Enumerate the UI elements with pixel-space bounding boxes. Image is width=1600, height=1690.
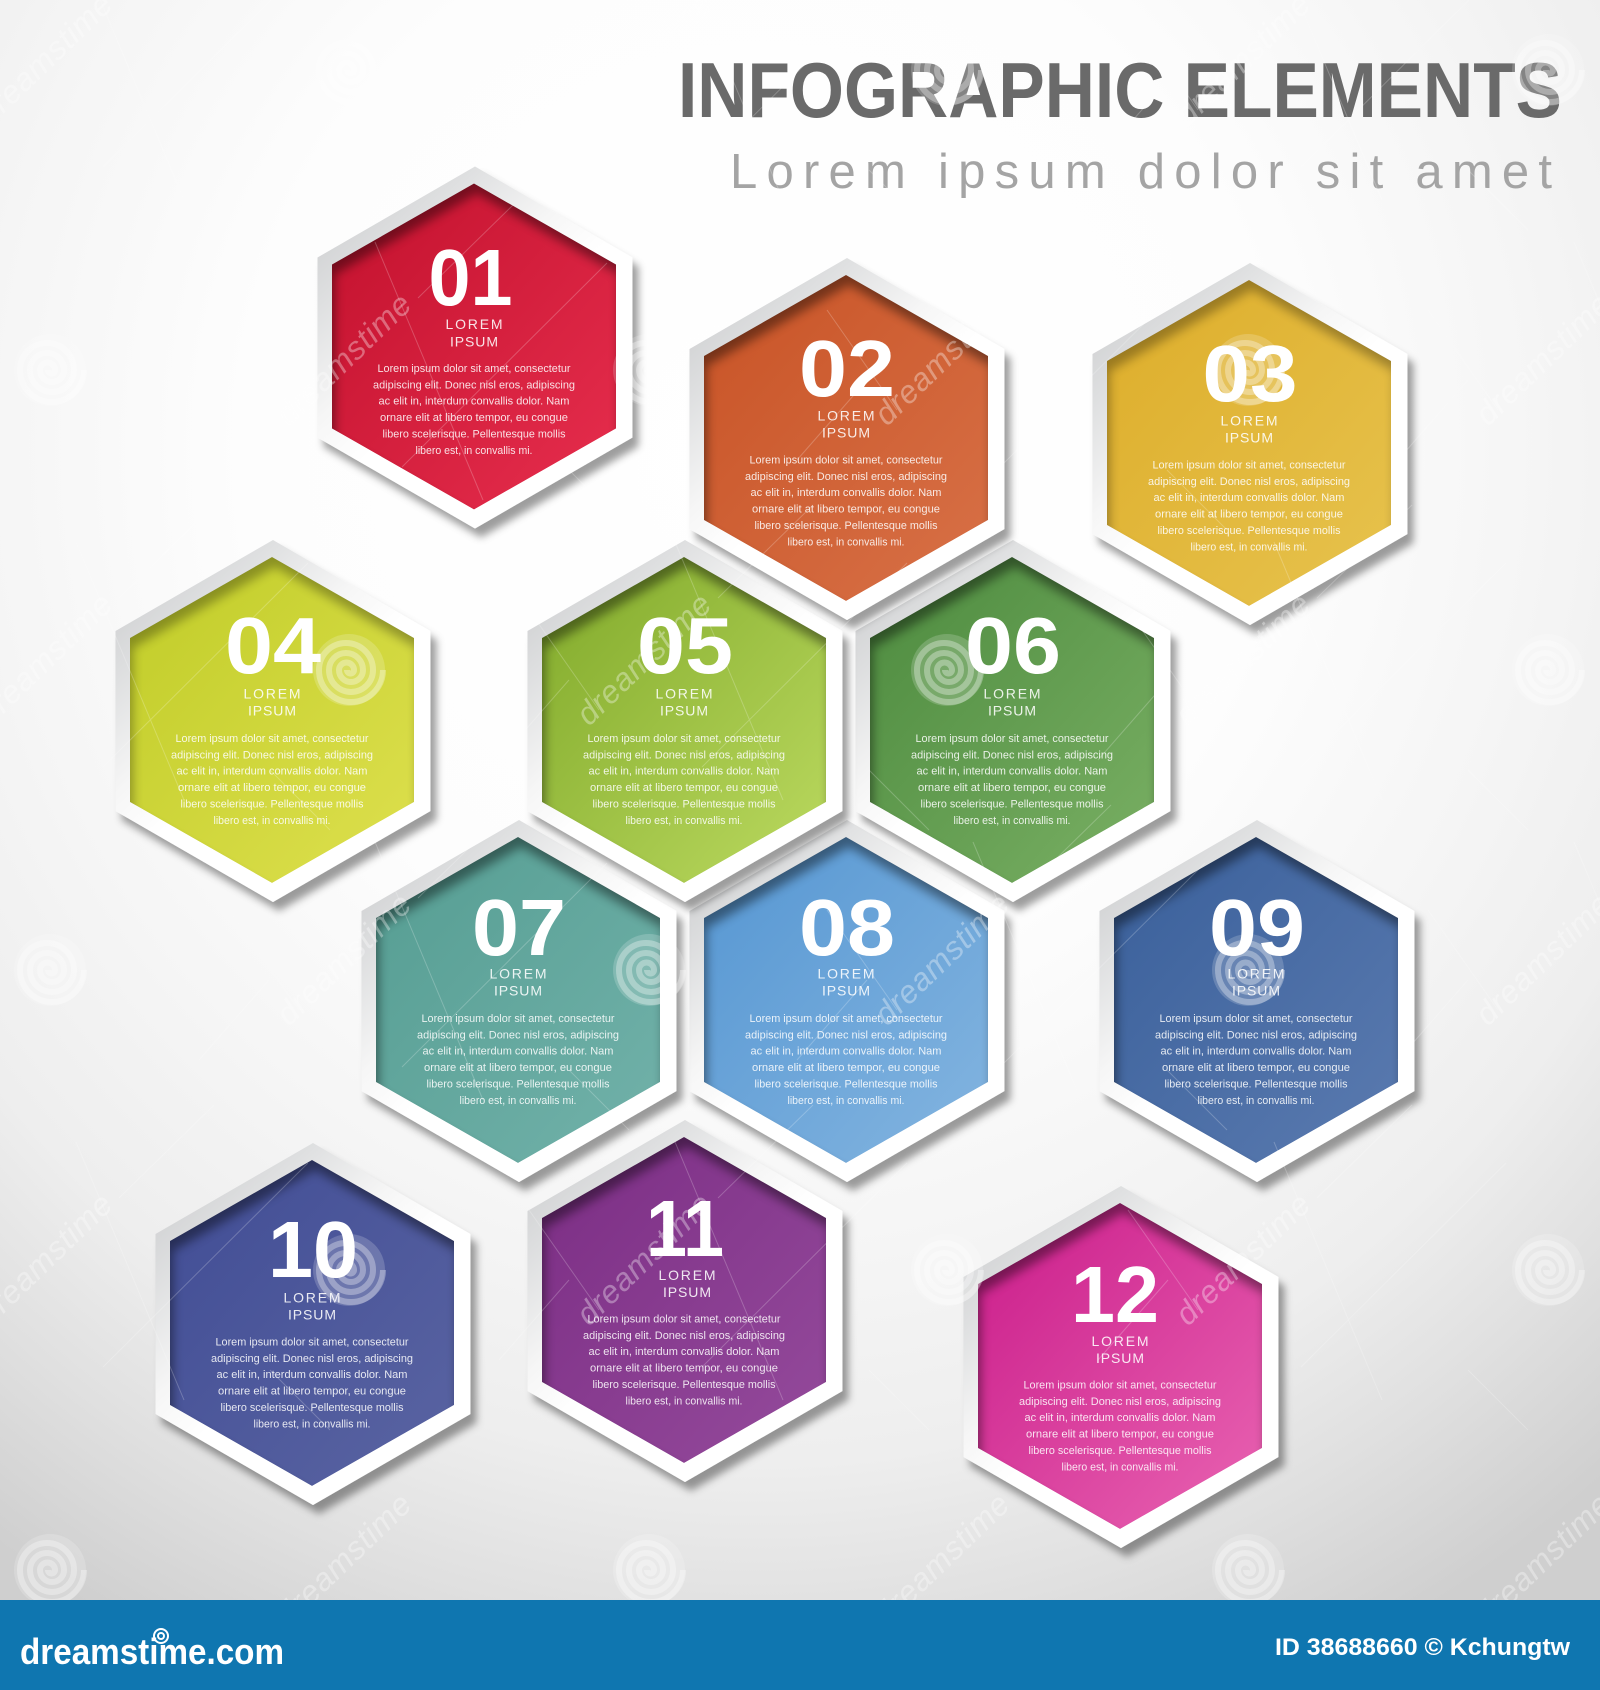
body text: adipiscing elit. Donec nisl eros, adipiscing	[373, 379, 575, 391]
body text: libero est, in convallis mi.	[416, 445, 532, 457]
body text: libero scelerisque. Pellentesque mollis	[426, 1078, 610, 1090]
panel: hexagon 05	[528, 540, 854, 914]
label	[1220, 412, 1278, 446]
body text: libero est, in convallis mi.	[788, 1095, 904, 1107]
body text: adipiscing elit. Donec nisl eros, adipiscing	[211, 1353, 413, 1365]
body text: ac elit in, interdum convallis dolor. Nam	[750, 1046, 942, 1058]
body text: ac elit in, interdum convallis dolor. Nam	[1160, 1046, 1352, 1058]
label: LOREM	[818, 966, 874, 982]
body text: ornare elit at libero tempor, eu congue	[752, 1062, 940, 1074]
body text: libero scelerisque. Pellentesque mollis	[592, 798, 776, 810]
body text: ornare elit at libero tempor, eu congue	[218, 1386, 406, 1398]
body text: adipiscing elit. Donec nisl eros, adipiscing	[1148, 476, 1350, 488]
body text: ac elit in, interdum convallis dolor. Nam	[588, 1346, 780, 1358]
frame	[690, 820, 1004, 1182]
body text: libero scelerisque. Pellentesque mollis	[382, 428, 566, 440]
number: 04	[225, 601, 322, 690]
body text: libero scelerisque. Pellentesque mollis	[920, 798, 1104, 810]
label: LOREM	[984, 686, 1040, 702]
body text: libero scelerisque. Pellentesque mollis	[1158, 525, 1340, 537]
body text: libero est, in convallis mi.	[254, 1418, 370, 1430]
label: LOREM	[284, 1290, 340, 1306]
body text: adipiscing elit. Donec nisl eros, adipiscing	[745, 471, 947, 483]
body text: Lorem ipsum dolor sit amet, consectetur	[1024, 1380, 1217, 1392]
number: 05	[637, 601, 733, 690]
colour fill	[130, 557, 414, 883]
frame	[1100, 820, 1414, 1182]
body text	[745, 454, 947, 548]
colour fill	[1114, 837, 1398, 1163]
label: IPSUM	[660, 702, 708, 718]
panel: hexagon 10	[156, 1143, 482, 1518]
panel: hexagon 03	[1092, 263, 1418, 638]
watermark text: dreamstime	[269, 1486, 418, 1632]
body text: libero est, in convallis mi.	[1198, 1095, 1314, 1107]
body text	[1155, 1013, 1357, 1107]
watermark text: dreamstime	[269, 286, 418, 432]
body text: ornare elit at libero tempor, eu congue	[424, 1062, 612, 1074]
body text	[417, 1013, 619, 1107]
body text: adipiscing elit. Donec nisl eros, adipiscing	[417, 1029, 619, 1041]
body text: libero scelerisque. Pellentesque mollis	[1164, 1078, 1348, 1090]
colour fill	[542, 1137, 826, 1463]
colour fill	[870, 557, 1154, 883]
body text: ac elit in, interdum convallis dolor. Nam	[1154, 492, 1345, 504]
body text: ac elit in, interdum convallis dolor. Nam	[1024, 1412, 1216, 1424]
body text	[171, 733, 373, 827]
footer credit: ID 38688660 © Kchungtw	[1275, 1634, 1570, 1661]
body text: Lorem ipsum dolor sit amet, consectetur	[176, 733, 369, 745]
panel: hexagon 09	[1100, 820, 1426, 1194]
label	[284, 1290, 340, 1322]
body text: libero scelerisque. Pellentesque mollis	[754, 520, 938, 532]
frame	[528, 1120, 842, 1482]
number: 01	[428, 233, 512, 322]
body text	[211, 1336, 413, 1430]
panel: hexagon 04	[116, 540, 442, 914]
body text: ac elit in, interdum convallis dolor. Nam	[916, 766, 1108, 778]
body text: ornare elit at libero tempor, eu congue	[178, 782, 366, 794]
body text: ornare elit at libero tempor, eu congue	[752, 504, 940, 516]
number: 08	[799, 883, 895, 972]
body text: adipiscing elit. Donec nisl eros, adipiscing	[911, 749, 1113, 761]
body text	[583, 1314, 785, 1408]
body text: Lorem ipsum dolor sit amet, consectetur	[588, 733, 781, 745]
label	[656, 686, 712, 718]
number: 06	[965, 601, 1061, 690]
footer logo text: dreamstime.com	[20, 1631, 284, 1672]
body text: ac elit in, interdum convallis dolor. Nam	[378, 396, 570, 408]
body text: adipiscing elit. Donec nisl eros, adipiscing	[745, 1029, 947, 1041]
panel: hexagon 08	[690, 820, 1016, 1194]
label: IPSUM	[288, 1306, 336, 1322]
body text: ornare elit at libero tempor, eu congue	[380, 412, 568, 424]
body text: Lorem ipsum dolor sit amet, consectetur	[750, 454, 943, 466]
body text: libero est, in convallis mi.	[1062, 1462, 1178, 1474]
frame	[362, 820, 676, 1182]
watermark text: dreamstime	[867, 286, 1016, 432]
body text	[373, 363, 575, 457]
body text: adipiscing elit. Donec nisl eros, adipiscing	[1155, 1029, 1357, 1041]
label: LOREM	[1092, 1333, 1148, 1349]
body text: ac elit in, interdum convallis dolor. Nam	[176, 766, 368, 778]
label: LOREM	[1228, 966, 1284, 982]
frame	[1092, 263, 1408, 625]
label	[658, 1267, 716, 1300]
label: IPSUM	[822, 982, 870, 998]
colour fill	[376, 837, 660, 1163]
label: IPSUM	[1225, 430, 1273, 446]
body text: Lorem ipsum dolor sit amet, consectetur	[916, 733, 1109, 745]
number: 02	[799, 324, 895, 413]
number: 10	[268, 1205, 358, 1294]
frame	[156, 1143, 470, 1505]
icon: logo spiral	[154, 1629, 168, 1643]
watermark text: dreamstime	[1168, 1186, 1317, 1332]
footer band	[0, 1600, 1600, 1690]
frame	[964, 1186, 1278, 1548]
label: IPSUM	[248, 702, 296, 718]
label: LOREM	[1220, 412, 1278, 428]
number: 03	[1203, 329, 1297, 418]
body text: adipiscing elit. Donec nisl eros, adipiscing	[583, 749, 785, 761]
body text: libero est, in convallis mi.	[626, 815, 742, 827]
body text	[911, 733, 1113, 827]
colour fill	[1107, 280, 1391, 606]
body text: ac elit in, interdum convallis dolor. Nam	[216, 1369, 408, 1381]
body text: libero est, in convallis mi.	[214, 815, 330, 827]
panel: hexagon 01	[318, 166, 644, 541]
watermark text: dreamstime	[569, 586, 718, 732]
body text: ac elit in, interdum convallis dolor. Nam	[588, 766, 780, 778]
number: 11	[646, 1184, 724, 1273]
body text: Lorem ipsum dolor sit amet, consectetur	[1152, 460, 1346, 472]
number: 12	[1071, 1250, 1159, 1339]
body text: libero est, in convallis mi.	[954, 815, 1070, 827]
body text: ornare elit at libero tempor, eu congue	[1026, 1428, 1214, 1440]
label	[818, 966, 874, 998]
frame	[856, 540, 1170, 902]
colour fill	[170, 1160, 454, 1486]
body text: adipiscing elit. Donec nisl eros, adipiscing	[583, 1330, 785, 1342]
colour fill	[704, 275, 988, 601]
body text: libero scelerisque. Pellentesque mollis	[1028, 1445, 1212, 1457]
colour fill	[332, 184, 616, 510]
body text: libero scelerisque. Pellentesque mollis	[220, 1402, 404, 1414]
watermark text: dreamstime	[269, 886, 418, 1032]
body text: libero scelerisque. Pellentesque mollis	[592, 1379, 776, 1391]
number: 09	[1209, 883, 1305, 972]
label: LOREM	[490, 966, 546, 982]
label: IPSUM	[1096, 1350, 1144, 1366]
panel: hexagon 02	[690, 258, 1016, 632]
body text: ornare elit at libero tempor, eu congue	[1155, 508, 1343, 520]
label: IPSUM	[988, 702, 1036, 718]
frame	[116, 540, 430, 902]
label: LOREM	[656, 686, 712, 702]
body text: Lorem ipsum dolor sit amet, consectetur	[588, 1314, 781, 1326]
body text: ornare elit at libero tempor, eu congue	[590, 1362, 778, 1374]
body text: libero scelerisque. Pellentesque mollis	[180, 798, 364, 810]
body text: Lorem ipsum dolor sit amet, consectetur	[216, 1336, 409, 1348]
label: LOREM	[244, 686, 300, 702]
label	[1228, 966, 1284, 998]
body text: libero est, in convallis mi.	[788, 536, 904, 548]
body text: libero scelerisque. Pellentesque mollis	[754, 1078, 938, 1090]
panel: hexagon 11	[528, 1120, 854, 1494]
body text: ornare elit at libero tempor, eu congue	[590, 782, 778, 794]
body text: libero est, in convallis mi.	[626, 1396, 742, 1408]
body text	[745, 1013, 947, 1107]
body text: Lorem ipsum dolor sit amet, consectetur	[422, 1013, 615, 1025]
body text: Lorem ipsum dolor sit amet, consectetur	[750, 1013, 943, 1025]
panel: hexagon 12	[964, 1186, 1290, 1560]
watermark text: dreamstime	[867, 1486, 1016, 1632]
label: IPSUM	[1232, 982, 1280, 998]
frame	[318, 166, 632, 528]
body text: libero est, in convallis mi.	[460, 1095, 576, 1107]
colour fill	[978, 1203, 1262, 1529]
watermark text: dreamstime	[1168, 586, 1317, 732]
body text: libero est, in convallis mi.	[1190, 542, 1308, 554]
panel: hexagon 07	[362, 820, 688, 1194]
body text: ornare elit at libero tempor, eu congue	[1162, 1062, 1350, 1074]
frame	[528, 540, 842, 902]
subtitle: Lorem ipsum dolor sit amet	[730, 145, 1552, 199]
label	[244, 686, 300, 718]
body text: adipiscing elit. Donec nisl eros, adipiscing	[171, 749, 373, 761]
colour fill	[704, 837, 988, 1163]
body text: ac elit in, interdum convallis dolor. Nam	[750, 487, 942, 499]
watermark text: dreamstime	[867, 886, 1016, 1032]
watermark text: dreamstime	[569, 1186, 718, 1332]
number: 07	[472, 883, 566, 972]
label	[1092, 1333, 1148, 1366]
body text: ornare elit at libero tempor, eu congue	[918, 782, 1106, 794]
label: LOREM	[818, 408, 874, 424]
body text: adipiscing elit. Donec nisl eros, adipiscing	[1019, 1396, 1221, 1408]
body text	[583, 733, 785, 827]
label: IPSUM	[663, 1284, 711, 1300]
label: LOREM	[658, 1267, 716, 1283]
frame	[690, 258, 1004, 620]
label: IPSUM	[450, 334, 498, 350]
body text: ac elit in, interdum convallis dolor. Nam	[422, 1046, 614, 1058]
label: IPSUM	[494, 982, 542, 998]
label	[446, 316, 502, 350]
label	[818, 408, 874, 440]
body text: Lorem ipsum dolor sit amet, consectetur	[378, 363, 571, 375]
label: LOREM	[446, 316, 502, 332]
body text	[1019, 1380, 1221, 1474]
label	[490, 966, 546, 998]
body text: Lorem ipsum dolor sit amet, consectetur	[1160, 1013, 1353, 1025]
colour fill	[542, 557, 826, 883]
label: IPSUM	[822, 424, 870, 440]
body text	[1148, 460, 1350, 554]
label	[984, 686, 1040, 718]
panel: hexagon 06	[856, 540, 1182, 914]
